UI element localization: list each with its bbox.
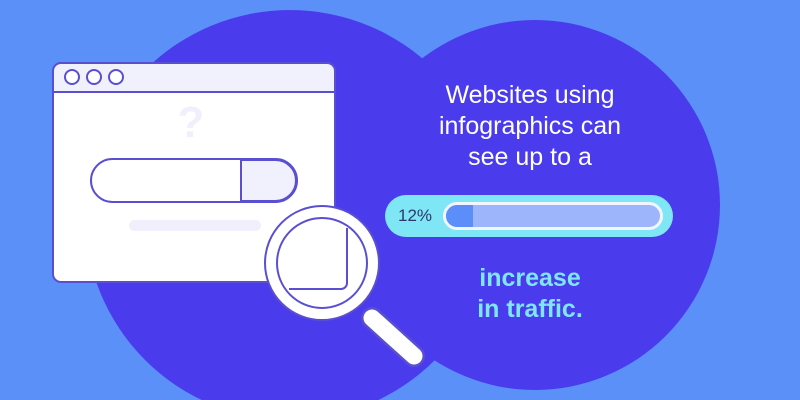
headline text: infographics can [439, 112, 621, 140]
browser window: ? [178, 98, 204, 147]
closing text: in traffic. [477, 295, 583, 323]
headline text [439, 81, 621, 171]
headline text: Websites using [445, 81, 615, 109]
headline text: see up to a [468, 143, 592, 171]
browser window [53, 63, 335, 282]
magnifier [265, 206, 414, 356]
closing text: increase [479, 264, 581, 292]
progress pill: 12%: 12% [398, 206, 432, 225]
closing text [477, 264, 583, 323]
progress pill: 12% [385, 195, 673, 237]
